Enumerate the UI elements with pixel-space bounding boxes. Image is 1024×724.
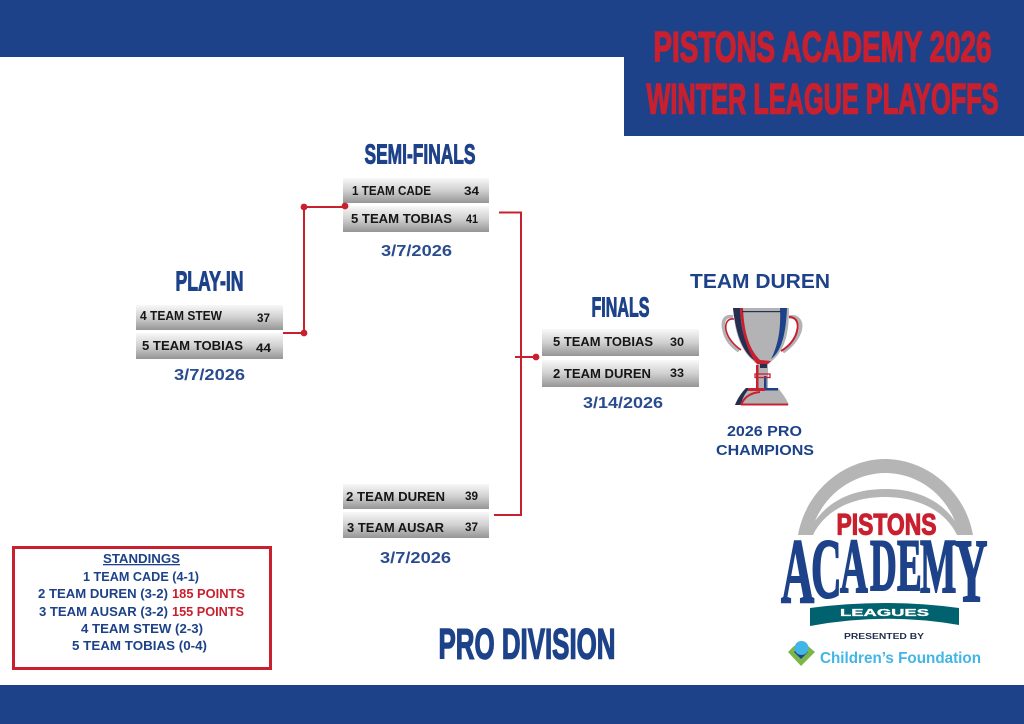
presented by: PRESENTED BY [844, 632, 925, 641]
team row: 4 Team Stew: 4 TEAM STEW [140, 309, 222, 323]
logo wordmark: Academy: A [840, 525, 868, 610]
team row: 5 Team Tobias [542, 329, 699, 356]
logo banner: Leagues: LEAGUES [840, 608, 930, 619]
team row: 1 Team Cade [343, 178, 489, 203]
team row: 2 Team Duren: 2 TEAM DUREN [346, 490, 445, 504]
team row: 1 Team Cade: 1 TEAM CADE [352, 184, 431, 198]
team row: 5 Team Tobias: 5 TEAM TOBIAS [351, 212, 452, 226]
standings heading: STANDINGS [103, 551, 180, 566]
connector: semi-finals to finals [494, 212, 539, 515]
connector: play-in to semi-finals [283, 203, 348, 336]
base [735, 388, 789, 405]
date: semi-final 2: 3/7/2026 [380, 550, 451, 567]
logo arches [798, 459, 973, 535]
team row: 2 Team Duren: 2 TEAM DUREN [553, 367, 651, 381]
logo: Pistons Academy Leagues [781, 459, 988, 667]
champions caption [716, 424, 814, 459]
play-in matchup [136, 305, 283, 359]
logo wordmark: Academy: C [811, 521, 842, 616]
cup [733, 308, 789, 364]
team row: 5 Team Tobias [136, 333, 283, 359]
date: play-in: 3/7/2026 [174, 367, 245, 384]
team row: 1 Team Cade: 34 [464, 186, 480, 198]
standings rows: 185 POINTS [172, 586, 245, 601]
heading: play-in: PLAY-IN [176, 266, 244, 296]
logo wordmark: Academy: A [781, 520, 814, 622]
team row: 3 Team Ausar: 37 [465, 522, 478, 534]
logo wordmark: Pistons: PISTONS [836, 508, 936, 542]
logo wordmark: Academy: M [920, 525, 956, 610]
champions caption: 2026 PRO [727, 424, 802, 440]
team row: 2 Team Duren: 39 [465, 491, 478, 503]
standings rows: 2 TEAM DUREN (3-2) [38, 586, 168, 601]
team row: 3 Team Ausar [343, 512, 489, 538]
team row: 5 Team Tobias: 5 TEAM TOBIAS [553, 335, 653, 349]
champions caption: CHAMPIONS [716, 443, 814, 459]
team row: 3 Team Ausar: 3 TEAM AUSAR [347, 521, 444, 535]
standings rows: 3 TEAM AUSAR (3-2) [39, 604, 168, 619]
finals matchup [542, 329, 699, 387]
team row: 5 Team Tobias [343, 206, 489, 232]
champion name: TEAM DUREN [690, 271, 830, 293]
standings rows: 4 TEAM STEW (2-3) [81, 621, 203, 636]
panel: standings [14, 548, 270, 668]
logo wordmark: Academy: D [870, 524, 897, 606]
logo banner: Leagues [810, 603, 959, 626]
standings rows: 155 POINTS [172, 604, 244, 619]
heading: finals: FINALS [592, 292, 650, 322]
standings rows: 5 TEAM TOBIAS (0-4) [72, 638, 207, 653]
standings rows: 1 TEAM CADE (4-1) [83, 569, 199, 584]
team row: 4 Team Stew: 37 [257, 313, 270, 325]
division label: PRO DIVISION [438, 620, 616, 668]
logo wordmark: Academy: Y [955, 523, 988, 621]
bottom banner [0, 685, 1024, 724]
team row: 4 Team Stew [136, 305, 283, 330]
date: semi-final 1: 3/7/2026 [381, 243, 452, 260]
top banner [0, 0, 1024, 57]
team row: 2 Team Duren [542, 360, 699, 387]
standings rows [38, 569, 245, 653]
title panel [624, 0, 1024, 136]
team row: 5 Team Tobias: 5 TEAM TOBIAS [142, 339, 243, 353]
semi-final matchup 1 [343, 178, 489, 232]
team row: 2 Team Duren: 33 [670, 368, 684, 380]
handles [723, 317, 739, 351]
icon: trophy [723, 308, 801, 406]
logo wordmark: Academy: E [897, 524, 922, 606]
team row: 5 Team Tobias: 41 [466, 214, 479, 226]
icon: Children's Foundation mark [788, 641, 815, 666]
semi-final matchup 2 [343, 484, 489, 538]
sponsor name: Children’s Foundation [820, 650, 981, 667]
date: finals: 3/14/2026 [583, 395, 663, 412]
team row: 5 Team Tobias: 44 [256, 343, 272, 355]
team row: 5 Team Tobias: 30 [670, 337, 684, 349]
team row: 2 Team Duren [343, 484, 489, 509]
heading: semi-finals: SEMI-FINALS [364, 138, 476, 170]
stem [757, 364, 768, 388]
